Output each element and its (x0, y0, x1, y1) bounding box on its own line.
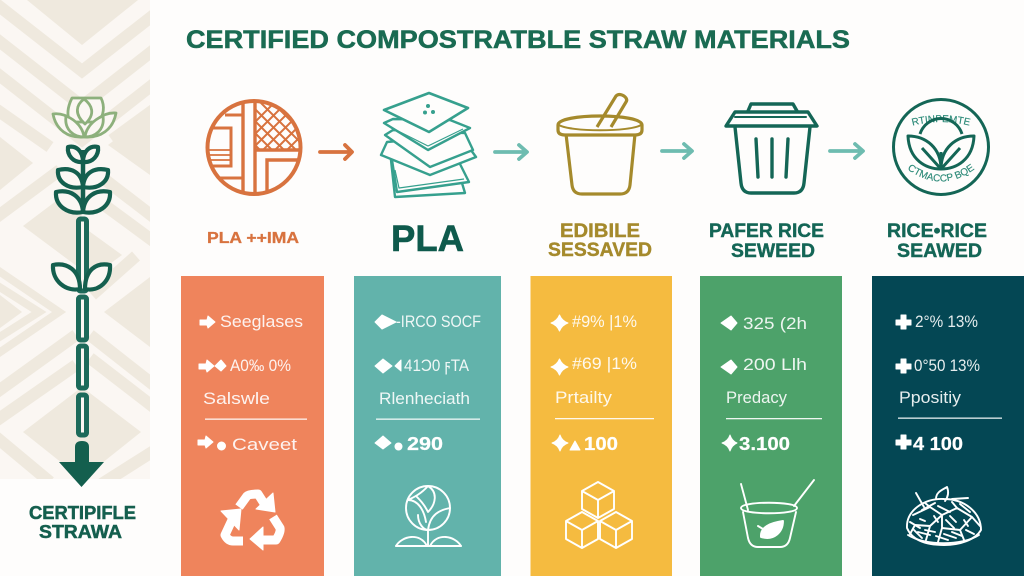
row bullets (198, 316, 226, 450)
label: paper rice seaweed (709, 221, 824, 262)
icon: segmented straw arrow (53, 219, 110, 487)
badge text: RTINPEMTE (912, 115, 970, 126)
panel: yellow (530, 276, 672, 576)
icon: three cubes (566, 482, 632, 548)
icon: salad bowl (907, 487, 981, 545)
icon: recycle (221, 493, 280, 550)
panel: green (700, 276, 842, 576)
panel text: 325 (2h (743, 315, 807, 333)
panel text (376, 313, 481, 454)
sidebar caption: STRAWA (39, 522, 122, 542)
panel text: #9% |1% (572, 313, 637, 331)
panel: left decorative chevron sidebar with straw plant (0, 0, 160, 487)
row bullets (896, 315, 911, 449)
panel: orange (181, 276, 324, 576)
panel text: #69 |1% (572, 355, 637, 373)
panel text: 2°% 13% (915, 313, 978, 331)
icon: lotus flower (53, 98, 116, 137)
icon: bin (726, 104, 817, 193)
row bullets (375, 315, 402, 450)
panel text: 290 (407, 434, 443, 454)
label: rice seaweed (887, 221, 987, 262)
panel text: -IRCO SOCF (396, 313, 481, 331)
panel text: Predacy (726, 389, 788, 407)
panel text (726, 315, 822, 454)
panel text: Salswle (203, 390, 270, 408)
label: rice seaweed: SEAWED (897, 241, 982, 262)
sidebar caption: CERTIPIFLE (29, 503, 136, 523)
label: edible seaweed: EDIBILE (560, 221, 640, 242)
icon: certification badge (892, 98, 990, 196)
panel text: 3.100 (739, 434, 790, 454)
arrow: teal 3 (830, 144, 863, 158)
title: CERTIFIED COMPOSTRATBLE STRAW MATERIALS (186, 26, 850, 54)
panel text: Ppositiy (899, 389, 962, 407)
label: paper rice seaweed: SEWEED (731, 241, 815, 262)
label: edible seaweed (548, 221, 652, 261)
icon: stacked sheets (381, 93, 476, 197)
arrow: teal 1 (495, 145, 527, 159)
label: paper rice seaweed: PAFER RICE (709, 221, 824, 242)
panel text (555, 313, 654, 454)
panel text: Rlenheciath (379, 390, 470, 408)
panel text: 100 (584, 434, 618, 454)
panel text (898, 313, 1002, 454)
badge text: CTMACCP BQE (908, 164, 974, 182)
panel: dark teal (872, 276, 1024, 576)
panel text: 200 Llh (743, 356, 807, 374)
arrow: teal 2 (662, 144, 692, 158)
panel text: Caveet (232, 436, 298, 454)
arrow: orange (320, 145, 352, 159)
panel text: Seeglases (220, 313, 303, 331)
dots on top sheet (423, 104, 435, 114)
icon: plant in globe (396, 486, 461, 546)
panel text: Prtailty (555, 389, 613, 407)
panel text: 41Ͻ0 ϝTA (404, 357, 469, 375)
icon: leafy stem (56, 147, 110, 214)
panel text: 4 100 (913, 434, 963, 454)
sidebar caption (29, 503, 136, 542)
panel text: 0°50 13% (914, 357, 980, 375)
icon: drink cup with leaf (741, 480, 814, 547)
label: edible seaweed: SESSAVED (548, 240, 652, 261)
row bullets (551, 315, 580, 451)
panel: teal (354, 276, 501, 576)
icon: cup with straw (558, 94, 642, 194)
panel text: A0‰ 0% (230, 357, 291, 375)
badge text (908, 115, 974, 182)
label: rice seaweed: RICE•RICE (887, 221, 987, 242)
row bullets (721, 316, 737, 451)
label: PLA ++IMA: PLA ++IMA (207, 230, 299, 247)
label: PLA: PLA (391, 218, 464, 259)
badge leaves (908, 119, 974, 169)
icon: orange patterned circle (206, 99, 302, 196)
panel text (203, 313, 307, 454)
